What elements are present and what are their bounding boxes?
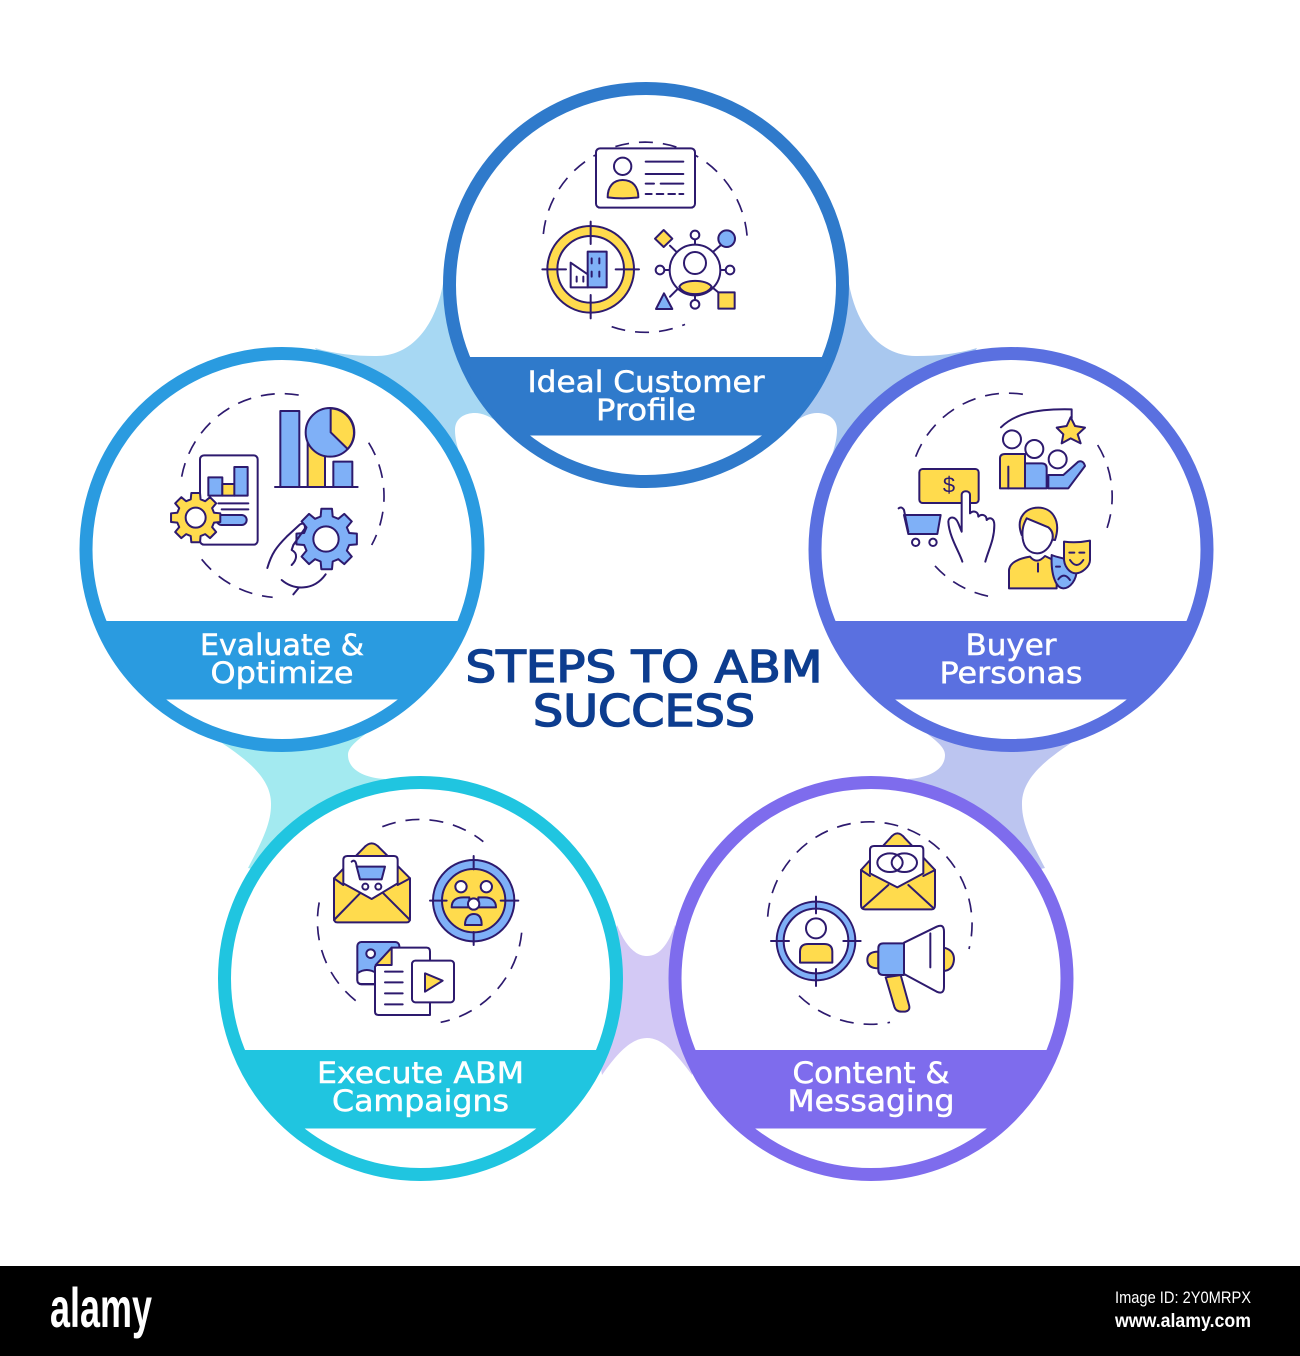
footer bar [0,1266,1300,1356]
label text: Evaluate & [200,628,364,662]
connector: evaluate to execute [210,600,392,900]
icons: email with link, target person, megaphone [768,822,972,1024]
label band [836,621,1186,700]
image id: Image ID: 2Y0MRPX [1115,1288,1251,1307]
label text: Profile [596,393,696,427]
label text [200,628,364,690]
label text: Messaging [788,1084,954,1118]
panel: ideal customer profile [440,88,852,482]
icons: profile card, target building, network [542,142,747,332]
connector: execute to content [590,925,700,1075]
title: SUCCESS [533,686,755,737]
label text: Optimize [210,656,354,690]
icons: report with gear, bar and pie chart, hand with gear [171,394,384,597]
label text: Execute ABM [317,1056,524,1090]
panel: buyer personas [805,354,1217,746]
icons: audience with star, price tag with hand and cart, person with masks [899,393,1112,597]
label text [788,1056,954,1118]
label text: Campaigns [332,1084,509,1118]
icons: email with cart, target audience, media documents [317,819,522,1022]
panel: content and messaging [665,782,1077,1174]
website: www.alamy.com [1114,1311,1251,1332]
label text [528,365,765,427]
label band [106,621,458,700]
label text [317,1056,524,1118]
icons: audience with star, price tag with hand and cart, person with masks: $ [943,473,955,498]
label text: Personas [940,656,1082,690]
title [466,642,822,737]
label text: Content & [792,1056,950,1090]
connector: ideal customer profile to evaluate [315,270,560,500]
label band [696,1050,1046,1128]
label text: Ideal Customer [528,365,765,399]
connector: ideal customer profile to buyer personas [732,270,977,500]
label band [470,357,822,436]
footer logo: alamy [50,1276,152,1339]
label text: Buyer [966,628,1057,662]
title: STEPS TO ABM [466,642,822,693]
panel: evaluate and optimize [76,354,488,746]
label band [245,1050,596,1128]
label text [940,628,1082,690]
connector: buyer personas to content [901,600,1083,900]
panel: execute abm campaigns [214,782,626,1174]
